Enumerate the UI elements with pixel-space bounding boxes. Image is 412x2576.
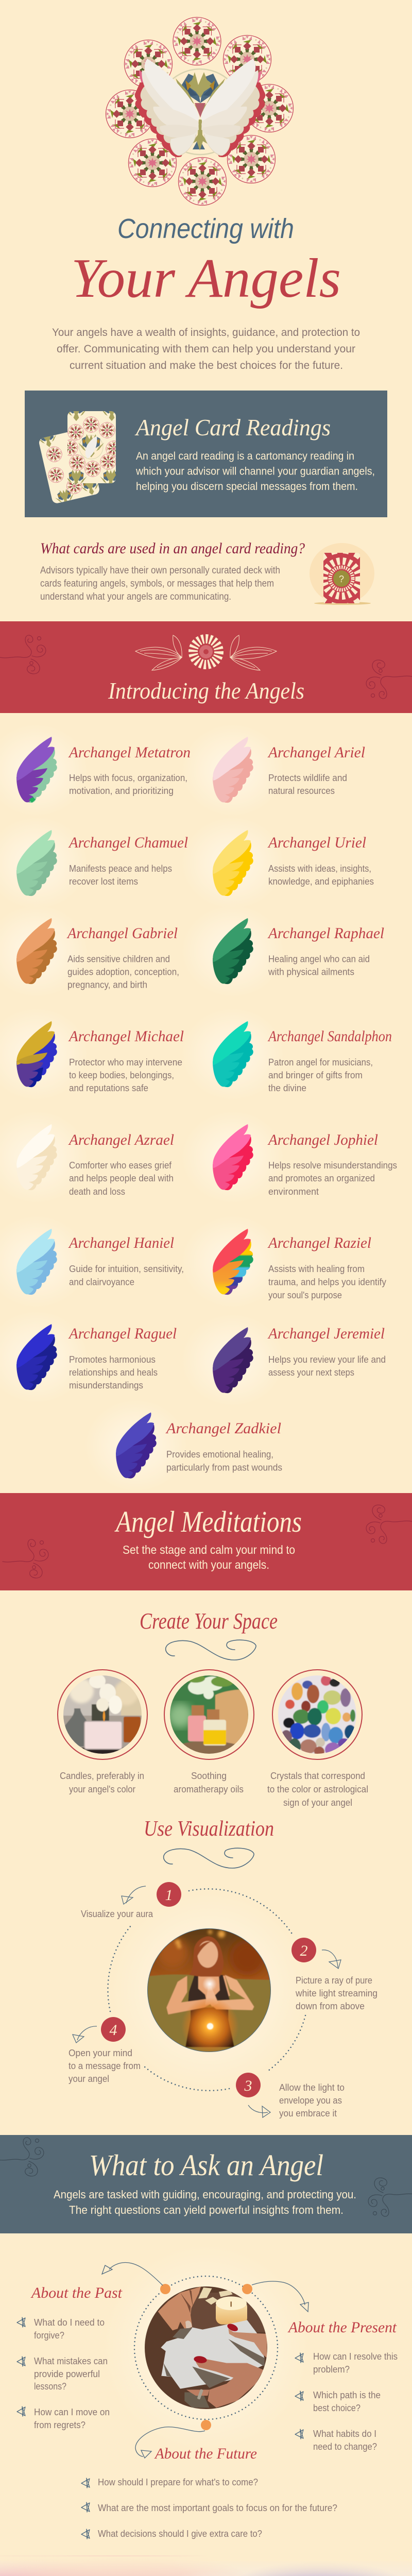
angel: Uriel: knowledge, and epiphanies [268,876,374,887]
angel: Raziel: Assists with healing from [268,1264,365,1274]
subtext: The right questions can yield powerful insights from them. [69,2204,344,2216]
heading: create your space: Create Your Space [140,1608,278,1634]
captions: Soothing [191,1771,227,1781]
about the past: provide powerful [34,2369,100,2379]
step 4: 4 [109,2022,117,2039]
angel: Jeremiel: assess your next steps [268,1367,354,1378]
angel: Azrael [16,1124,174,1197]
flourish [164,1848,254,1868]
step 3 [236,2073,345,2119]
step 2: down from above [296,2001,365,2011]
wing [16,737,57,803]
angel: Chamuel: recover lost items [69,876,138,887]
angel: Ariel: natural resources [268,786,335,796]
arrow: future [135,2427,205,2458]
icon: card back [310,543,374,609]
heading: Angel Card Readings: Angel Card Readings [134,414,331,440]
angel: Jophiel: and promotes an organized [268,1173,375,1183]
angel: Chamuel [16,830,188,896]
angel: Michael: and reputations safe [69,1083,148,1093]
angel: Gabriel: pregnancy, and birth [67,980,147,990]
orange dot [160,2284,170,2294]
orange dot [242,2284,252,2294]
captions: aromatherapy oils [174,1784,244,1794]
captions: to the color or astrological [267,1784,368,1794]
angel: Jeremiel [213,1325,386,1393]
angel: Metatron: Helps with focus, organization, [69,773,187,783]
angel: Jeremiel: Archangel Jeremiel [267,1325,385,1342]
about the present: problem? [313,2364,350,2375]
angel: Zadkiel: Archangel Zadkiel [165,1420,281,1437]
angel: Ariel [213,737,365,803]
dotted ring [134,2276,278,2419]
angel: Raguel: misunderstandings [69,1380,143,1391]
about the present [287,2319,398,2452]
about the future: How should I prepare for what's to come? [98,2477,258,2487]
angel: Ariel: Archangel Ariel [267,744,365,761]
angel: Uriel [213,830,374,896]
body text: An angel card reading is a cartomancy reading in [136,450,354,462]
photo: aromatherapy oils [164,1670,254,1759]
icon: flower with line wings [135,635,277,670]
angel: Ariel: Protects wildlife and [268,773,347,783]
heading: Introducing the Angels: Introducing the Angels [108,677,304,704]
angel: Sandalphon: the divine [268,1083,306,1093]
photo: candles [58,1670,147,1759]
wing [16,1324,57,1390]
central glow [103,2245,309,2451]
subtext [54,2188,356,2216]
body text [135,450,375,493]
angel: Raphael: with physical ailments [268,967,354,977]
about the future [81,2445,337,2539]
angel: Gabriel: Aids sensitive children and [67,954,170,964]
decorative swirl right [366,1505,412,1544]
arrow: past [102,2262,163,2285]
step 2: white light streaming [295,1988,377,1998]
wing [213,1124,253,1190]
captions: your angel's color [69,1784,135,1794]
angel: Gabriel [16,918,179,990]
step 2: 2 [300,1942,308,1959]
title: Your Angels [71,248,341,309]
step 2: Picture a ray of pure [296,1975,372,1986]
captions: Candles, preferably in [60,1771,144,1781]
decorative swirl right [368,2178,412,2216]
angel: Michael: to keep bodies, belongings, [69,1070,174,1080]
about the past: lessons? [34,2381,66,2392]
wing [213,1229,253,1295]
intro text: current situation and make the best choices for the future. [70,360,343,371]
step 1: Visualize your aura [81,1909,153,1919]
dotted ring [108,1889,305,2091]
about the future: What decisions should I give extra care to? [98,2529,262,2539]
about the present: How can I resolve this [313,2351,398,2362]
heading: What to Ask an Angel [89,2148,323,2182]
about the present: Which path is the [313,2390,381,2400]
angel: Jophiel: Helps resolve misunderstandings [268,1160,397,1171]
captions: sign of your angel [283,1798,352,1808]
angel: Raphael: Healing angel who can aid [268,954,370,964]
angel: Raziel: Archangel Raziel [267,1234,371,1251]
body text: helping you discern special messages from them. [136,480,358,493]
angel: Raziel: trauma, and helps you identify [268,1277,386,1287]
angel: Jophiel [213,1124,397,1197]
paragraph: understand what your angels are communicating. [40,591,231,602]
title: Connecting with [117,213,294,244]
angel: Michael: Archangel Michael [68,1028,184,1045]
wing [213,918,253,984]
wing [16,830,57,896]
wing [213,830,253,896]
questions diagram [17,2245,398,2539]
angel: Uriel: Archangel Uriel [267,834,366,851]
angel: Chamuel: Archangel Chamuel [68,834,188,851]
angel: Raziel [213,1229,386,1300]
step 4: Open your mind [68,2048,132,2058]
angel: Michael [16,1021,184,1093]
heading: Angel Meditations [114,1505,302,1538]
central glow [111,1892,307,2088]
wing [116,1413,157,1479]
icon: angel cards [39,411,116,503]
angel: Raziel: your soul's purpose [268,1290,342,1300]
about the past [17,2284,123,2430]
paragraph: cards featuring angels, symbols, or messages that help them [40,578,274,589]
section: what cards are used [40,543,374,605]
photo: crystals [272,1670,362,1759]
photo: hands with cards [144,2282,268,2411]
angel: Raguel: Archangel Raguel [68,1325,177,1342]
step 3: 3 [244,2077,252,2094]
photo: woman meditating [144,1927,273,2056]
angel: Zadkiel [116,1413,282,1479]
banner: introducing the angels [0,621,412,713]
left wing [135,59,199,157]
visualization diagram [68,1882,377,2119]
intro text: Your angels have a wealth of insights, guidance, and protection to [52,327,360,338]
step 4: to a message from [68,2061,141,2071]
center kaleidoscope medallion [158,69,243,155]
flourish [166,1640,256,1660]
about the future: What are the most important goals to focus on for the future? [98,2503,337,2513]
panel: cloud call to action [0,2545,412,2576]
angel: Sandalphon: Archangel Sandalphon [267,1028,392,1045]
lower infographic canvas [0,2555,412,2576]
body text: which your advisor will channel your guardian angels, [135,465,375,477]
panel: angel card readings [25,391,387,517]
wing [213,1021,253,1087]
wing [213,1327,253,1393]
angel: Metatron: Archangel Metatron [68,744,191,761]
step 1 [81,1882,181,1919]
about the future: About the Future [154,2445,257,2462]
about the present: best choice? [313,2403,360,2413]
angel: Haniel [16,1229,184,1295]
captions [60,1771,368,1808]
angel: Zadkiel: Provides emotional healing, [166,1449,273,1460]
angel: Raguel: Promotes harmonious [69,1354,156,1365]
orange dot [201,2420,211,2430]
angel: Raguel: relationships and heals [69,1367,158,1378]
step 1: 1 [165,1887,173,1904]
about the past: from regrets? [34,2420,85,2430]
decorative swirl left [3,1539,48,1578]
about the present: need to change? [313,2442,377,2452]
wing [213,737,253,803]
angel: Jeremiel: Helps you review your life and [268,1354,386,1365]
soft glows behind wings [0,724,284,1492]
subheading: What cards are used in an angel card reading? [40,540,305,557]
paragraph [40,565,280,602]
intro text: offer. Communicating with them can help you understand your [57,343,355,355]
mandala ring [106,18,294,205]
arrow: present [252,2281,308,2312]
step 4: your angel [68,2074,109,2084]
angel: Raguel [16,1324,177,1391]
angel: Gabriel: guides adoption, conception, [67,967,179,977]
subtext: Set the stage and calm your mind to [123,1543,295,1556]
wing [16,1021,57,1087]
angel: Sandalphon: Patron angel for musicians, [268,1057,373,1067]
about the past: How can I move on [34,2407,110,2417]
angel: Haniel: and clairvoyance [69,1277,134,1287]
paragraph: Advisors typically have their own personally curated deck with [40,565,280,576]
sky background [0,2545,412,2576]
step 3: envelope you as [279,2095,342,2106]
banner: angel meditations [0,1493,412,1590]
right wing [201,59,265,157]
angel: Metatron: motivation, and prioritizing [69,786,174,796]
step 3: Allow the light to [279,2082,345,2093]
about the past: What mistakes can [34,2356,108,2366]
angel: Haniel: Guide for intuition, sensitivity, [69,1264,184,1274]
intro text [52,327,360,371]
decorative swirl left [0,635,46,674]
about the present: What habits do I [313,2429,376,2439]
angel: Azrael: and helps people deal with [69,1173,174,1183]
step 4 [68,2017,141,2084]
step 2 [291,1938,377,2011]
angel: Sandalphon [213,1021,392,1093]
angel: Raphael [213,918,384,984]
hero emblem: mandala ring with white wings [106,18,294,205]
angel: Chamuel: Manifests peace and helps [69,863,172,874]
angel: Gabriel: Archangel Gabriel [66,925,178,942]
decorative swirl left [0,2138,44,2176]
angel: Zadkiel: particularly from past wounds [166,1462,282,1472]
wing [16,1229,57,1295]
about the present: About the Present [287,2319,397,2336]
decorative swirl right [366,660,412,699]
captions: Crystals that correspond [270,1771,365,1781]
icon: card back: ? [339,574,344,584]
heading: use visualization: Use Visualization [144,1817,274,1841]
angel: Metatron [16,737,191,803]
angel: Azrael: Comforter who eases grief [69,1160,172,1171]
about the past: About the Past [30,2284,123,2301]
angel: Jophiel: environment [268,1187,319,1197]
title [71,213,341,309]
step 3: you embrace it [279,2108,337,2119]
angel: Uriel: Assists with ideas, insights, [268,863,371,874]
banner: what to ask an angel [0,2135,412,2233]
angel: Michael: Protector who may intervene [69,1057,182,1067]
angel: Jophiel: Archangel Jophiel [267,1131,378,1148]
wing [16,918,57,984]
angel: Haniel: Archangel Haniel [68,1234,174,1251]
angel: Azrael: death and loss [69,1187,125,1197]
about the past: forgive? [34,2330,64,2341]
about the past: What do I need to [34,2317,105,2328]
wing [16,1124,57,1190]
subtext: connect with your angels. [148,1558,269,1571]
subtext [123,1543,295,1571]
subtext: Angels are tasked with guiding, encouraging, and protecting you. [54,2188,356,2201]
angel: Raphael: Archangel Raphael [267,925,384,942]
angel: Sandalphon: and bringer of gifts from [268,1070,363,1080]
angel: Azrael: Archangel Azrael [68,1131,174,1148]
